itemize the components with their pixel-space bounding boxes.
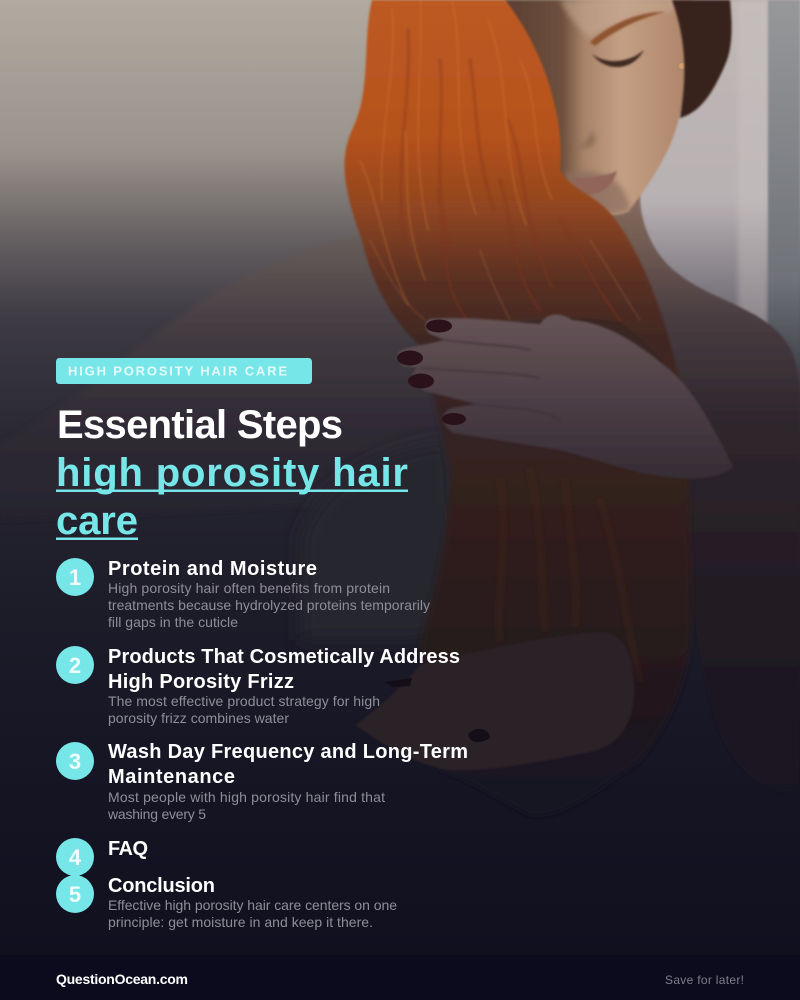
title: high porosity hair <box>56 451 408 495</box>
step 2 description: porosity frizz combines water <box>108 710 289 726</box>
dark hair bun <box>672 0 732 118</box>
step 2 number badge: 2 <box>69 653 81 678</box>
title <box>56 403 408 543</box>
step 1 description: treatments because hydrolyzed proteins temporarily <box>108 597 430 613</box>
step 1 <box>56 558 430 630</box>
title: care <box>56 499 138 543</box>
step 3 heading <box>108 741 468 788</box>
forehead highlight <box>560 0 680 38</box>
lower hair <box>420 300 692 816</box>
step 3 description: Most people with high porosity hair find that <box>108 789 385 805</box>
badge: high porosity hair care: HIGH POROSITY HAIR CARE <box>68 364 287 378</box>
save for later: Save for later! <box>665 973 744 987</box>
title: Essential Steps <box>57 403 343 447</box>
lips <box>572 171 617 195</box>
neck, shoulder and arm <box>570 170 800 792</box>
face <box>505 0 692 216</box>
step 5 number badge <box>56 875 94 913</box>
step 3 description <box>107 789 385 822</box>
step 1 number badge <box>56 558 94 596</box>
step 5 <box>56 875 397 930</box>
hand <box>398 314 733 478</box>
finger gaps <box>420 340 560 420</box>
step 3 <box>56 741 468 822</box>
eye <box>592 50 644 67</box>
lower face shadow <box>565 171 630 214</box>
step 1 description: fill gaps in the cuticle <box>108 614 238 630</box>
step 1 heading: Protein and Moisture <box>108 558 317 580</box>
step 3 number badge <box>56 742 94 780</box>
hair brush <box>355 632 634 770</box>
step 2 heading: High Porosity Frizz <box>108 671 294 693</box>
step 2 description <box>108 693 380 726</box>
step 2 heading: Products That Cosmetically Address <box>108 646 460 668</box>
brand name: QuestionOcean.com <box>56 971 188 987</box>
eyebrow <box>590 12 665 46</box>
step 5 description <box>108 897 397 930</box>
nose <box>575 130 595 148</box>
left shoulder and arm <box>0 232 470 520</box>
towel <box>300 440 470 640</box>
step 3 description: washing every 5 <box>107 806 206 822</box>
step 1 description <box>108 580 430 630</box>
step 3 number badge: 3 <box>69 749 81 774</box>
step 5 description: Effective high porosity hair care centers on one <box>108 897 397 913</box>
step 2 number badge <box>56 646 94 684</box>
nails <box>397 320 466 425</box>
step 2 description: The most effective product strategy for high <box>108 693 380 709</box>
step 4 number badge: 4 <box>69 845 82 870</box>
step 1 number badge: 1 <box>69 565 81 590</box>
step 4 <box>56 838 148 876</box>
step 2 <box>56 646 460 726</box>
red hair <box>345 0 680 385</box>
step 5 description: principle: get moisture in and keep it there. <box>108 914 373 930</box>
step 3 heading: Maintenance <box>108 766 235 788</box>
earring <box>679 63 685 69</box>
step 3 heading: Wash Day Frequency and Long-Term <box>108 741 468 763</box>
hair strands <box>360 0 640 320</box>
step 5 number badge: 5 <box>69 882 81 907</box>
badge: high porosity hair care <box>56 358 312 384</box>
brush fingertips <box>385 678 490 742</box>
step 5 heading: Conclusion <box>108 875 215 897</box>
lower hair strands <box>499 470 640 680</box>
footer bar <box>0 955 800 1000</box>
step 1 description: High porosity hair often benefits from protein <box>108 580 390 596</box>
step 4 heading: FAQ <box>108 838 148 860</box>
step 2 heading <box>108 646 460 693</box>
